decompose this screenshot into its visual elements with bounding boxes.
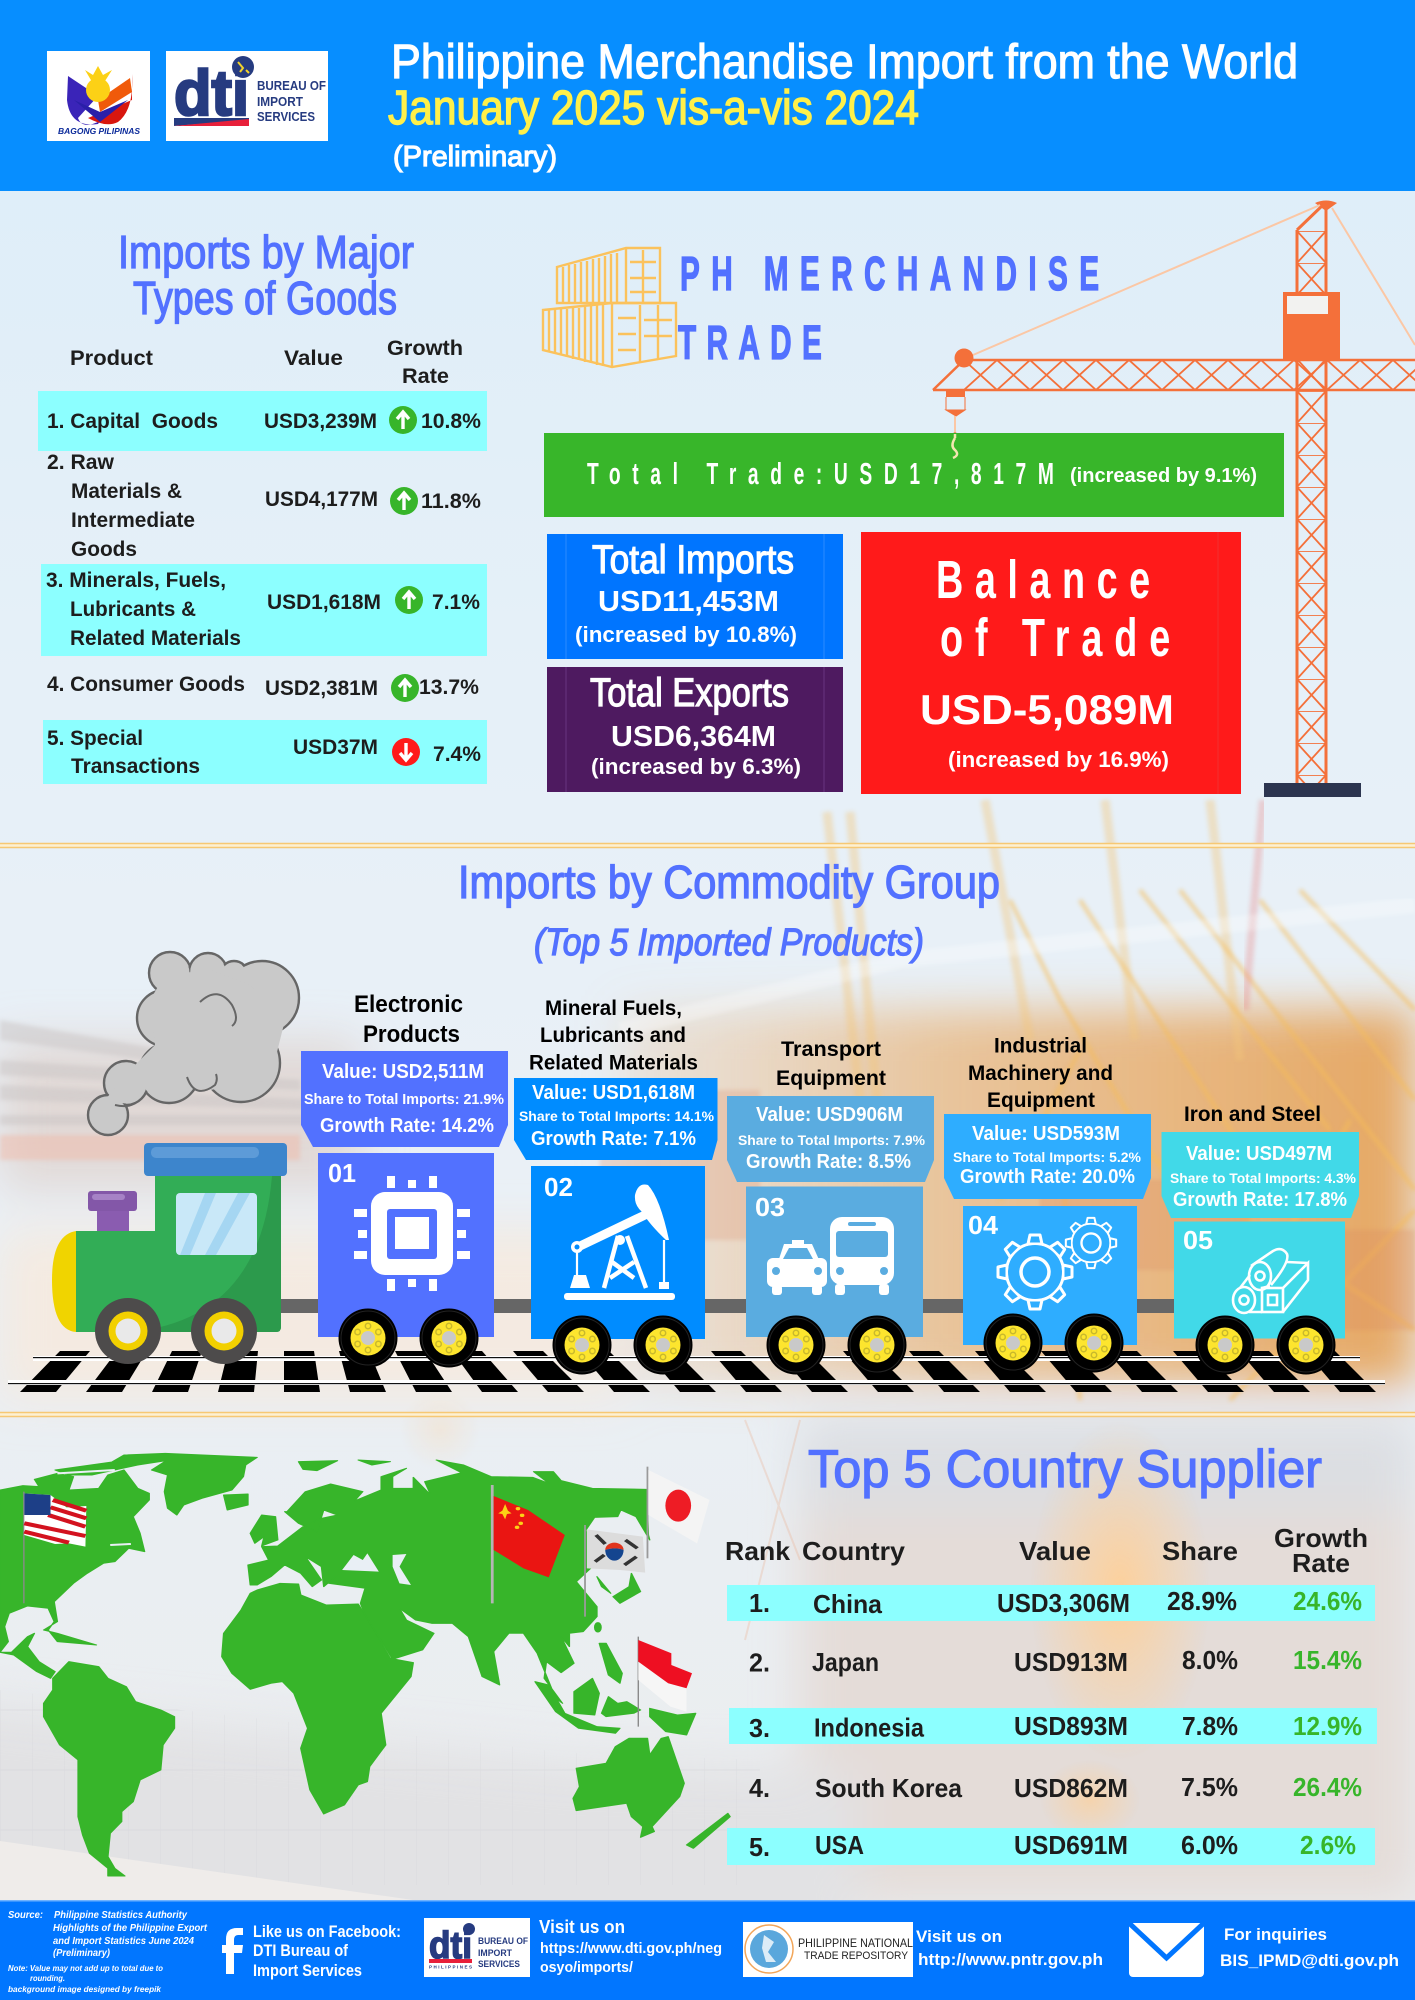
- stats box: Share to Total Imports: 21.9%: [304, 1091, 504, 1108]
- car label: Products: [363, 1021, 460, 1048]
- stats box: Value: USD593M: [972, 1123, 1120, 1145]
- illustration: tower crane: [933, 200, 1415, 797]
- stats box: Value: USD906M: [756, 1104, 903, 1126]
- train car 02: mineral fuels: [514, 997, 718, 1374]
- stats box: Growth Rate: 17.8%: [1173, 1189, 1347, 1211]
- table header: Value: [284, 347, 343, 370]
- PNTR website text: Visit us on: [916, 1927, 1002, 1946]
- world map with supplier flags: [0, 1453, 730, 1876]
- railway track: [8, 1351, 1385, 1392]
- panel: total trade: Total Trade:USD17,817M: [587, 458, 1054, 491]
- logo: DTI Bureau of Import Services: [166, 51, 328, 141]
- table: major types of goods: [38, 337, 487, 784]
- inquiries text: [1220, 1925, 1399, 1970]
- flag: China: [492, 1485, 565, 1603]
- row: minerals, fuels: 7.1%: [432, 591, 480, 614]
- source note: Note: Value may not add up to total due to: [8, 1963, 163, 1973]
- source note: (Preliminary): [53, 1947, 110, 1959]
- table header: Country: [802, 1536, 906, 1566]
- row: special transactions: USD37M: [293, 736, 378, 759]
- icon: steel rolls: [1233, 1249, 1308, 1313]
- facebook text: Like us on Facebook:: [253, 1923, 401, 1941]
- stats box: Growth Rate: 14.2%: [320, 1115, 494, 1137]
- row: China: China: [813, 1589, 883, 1619]
- source note: and Import Statistics June 2024: [53, 1935, 194, 1947]
- row: Japan: USD913M: [1014, 1647, 1128, 1677]
- table header: Growth: [387, 337, 463, 360]
- logo: DTI Bureau of Import Services: dti: [174, 57, 249, 129]
- row: Japan: Japan: [812, 1647, 879, 1677]
- logo: DTI small: PHILIPPINES: [429, 1964, 472, 1970]
- table header: Share: [1162, 1536, 1238, 1566]
- table header: Growth: [1274, 1523, 1368, 1553]
- car label: Machinery and: [968, 1062, 1113, 1085]
- car label: Iron and Steel: [1184, 1103, 1321, 1126]
- heading: imports by commodity group: [458, 856, 1000, 964]
- flag: Indonesia: [638, 1637, 692, 1727]
- row: Indonesia: 7.8%: [1182, 1711, 1238, 1741]
- row: South Korea: 26.4%: [1293, 1772, 1362, 1802]
- panel: total imports: USD11,453M: [598, 586, 779, 618]
- icon: shipping containers: [543, 248, 676, 367]
- row: minerals, fuels: 3. Minerals, Fuels,: [46, 569, 226, 592]
- logo: DTI small: [424, 1918, 530, 1977]
- row: special transactions: [43, 720, 487, 784]
- source note: [8, 1909, 207, 1994]
- heading: PH merchandise trade: [678, 248, 1099, 370]
- row: capital goods: 10.8%: [421, 410, 481, 433]
- icon: smoke cloud: [88, 952, 299, 1135]
- panel: total imports: Total Imports: [592, 538, 794, 582]
- icon: oil pump: [564, 1184, 675, 1300]
- panel: total trade: (increased by 9.1%): [1070, 465, 1257, 487]
- row: China: [727, 1585, 1375, 1621]
- train car 02: mineral fuels: 02: [544, 1172, 573, 1202]
- logo: DTI Bureau of Import Services: SERVICES: [257, 109, 315, 124]
- table header: [70, 337, 463, 388]
- flag: South Korea: [585, 1525, 645, 1617]
- row: South Korea: USD862M: [1014, 1773, 1128, 1803]
- car label: Lubricants and: [540, 1024, 686, 1047]
- logo: Philippine National Trade Repository: [743, 1922, 913, 1977]
- row: raw materials: Goods: [71, 538, 137, 561]
- row: USA: 5.: [749, 1832, 770, 1862]
- icon: gears: [998, 1218, 1116, 1309]
- row: South Korea: 7.5%: [1181, 1772, 1238, 1802]
- row: South Korea: 4.: [749, 1773, 770, 1803]
- row: minerals, fuels: Lubricants &: [70, 598, 196, 621]
- map continents: [0, 1453, 730, 1876]
- car label: [776, 1038, 886, 1090]
- DTI website text: osyo/imports/: [540, 1959, 634, 1976]
- row: consumer goods: [47, 673, 479, 702]
- row: raw materials: 2. Raw: [47, 451, 115, 474]
- panel: total imports: (increased by 10.8%): [575, 622, 797, 647]
- heading: PH merchandise trade: TRADE: [678, 317, 822, 370]
- panel: total exports: (increased by 6.3%): [591, 754, 801, 779]
- row: China: 1.: [749, 1588, 770, 1618]
- car label: Industrial: [994, 1034, 1087, 1058]
- logo: Bagong Pilipinas: BAGONG PILIPINAS: [58, 126, 140, 136]
- logo: DTI small: dti: [429, 1925, 472, 1967]
- row: South Korea: [749, 1772, 1362, 1803]
- car label: Equipment: [776, 1067, 886, 1090]
- train car 05: iron and steel: 05: [1183, 1225, 1213, 1255]
- heading: imports by major types of goods: [118, 226, 414, 324]
- title: [388, 36, 1298, 173]
- row: raw materials: Materials &: [71, 480, 182, 503]
- stats box: Growth Rate: 7.1%: [531, 1128, 696, 1150]
- panel: total exports: USD6,364M: [611, 721, 776, 753]
- row: China: 24.6%: [1293, 1586, 1362, 1616]
- stats box: Share to Total Imports: 7.9%: [738, 1132, 926, 1148]
- row: USA: [727, 1828, 1375, 1865]
- icon: taxi and bus: [767, 1217, 894, 1295]
- row: raw materials: USD4,177M: [265, 488, 378, 511]
- DTI website text: Visit us on: [539, 1917, 625, 1937]
- footer band: [0, 1900, 1415, 2000]
- table header: [725, 1523, 1368, 1578]
- row: Japan: 15.4%: [1293, 1645, 1362, 1675]
- row: raw materials: 11.8%: [421, 490, 481, 513]
- table header: Rank: [725, 1536, 791, 1566]
- facebook text: Import Services: [253, 1962, 362, 1980]
- panel: total exports: [547, 667, 843, 792]
- row: Indonesia: [729, 1708, 1377, 1744]
- row: consumer goods: USD2,381M: [265, 677, 378, 700]
- car label: Related Materials: [529, 1052, 698, 1074]
- row: raw materials: Intermediate: [71, 509, 195, 532]
- car label: [354, 991, 463, 1048]
- header band: [0, 0, 1415, 191]
- row: special transactions: 7.4%: [433, 743, 481, 766]
- row: USA: 6.0%: [1181, 1830, 1238, 1860]
- car label: [529, 997, 698, 1074]
- row: Japan: 8.0%: [1182, 1645, 1238, 1675]
- PNTR website text: http://www.pntr.gov.ph: [918, 1950, 1103, 1969]
- icon: microchip: [354, 1176, 470, 1291]
- car label: Equipment: [987, 1089, 1095, 1112]
- row: special transactions: 5. Special: [47, 727, 143, 750]
- row: Indonesia: 3.: [749, 1713, 770, 1743]
- icon: facebook: [222, 1928, 243, 1974]
- heading: imports by major types of goods: Types of Goods: [133, 272, 397, 324]
- train car 03: transport equipment: 03: [755, 1192, 785, 1222]
- row: capital goods: 1. Capital Goods: [47, 410, 218, 433]
- coupling bar: [281, 1299, 1345, 1313]
- row: minerals, fuels: USD1,618M: [267, 591, 381, 614]
- row: special transactions: Transactions: [71, 755, 200, 778]
- row: raw materials: [47, 451, 481, 561]
- train car 03: transport equipment: [727, 1038, 934, 1374]
- row: South Korea: South Korea: [815, 1773, 963, 1803]
- car label: Electronic: [354, 991, 463, 1018]
- logo: Bagong Pilipinas: [47, 51, 150, 141]
- row: Japan: [749, 1645, 1362, 1678]
- row: capital goods: USD3,239M: [264, 410, 377, 433]
- panel: total imports: [547, 534, 843, 659]
- DTI website text: https://www.dti.gov.ph/neg: [540, 1940, 722, 1957]
- panel: balance of trade: Balance: [936, 549, 1150, 610]
- stats box: Share to Total Imports: 14.1%: [519, 1108, 715, 1124]
- heading: top 5 country supplier: Top 5 Country Supplier: [808, 1440, 1322, 1499]
- row: China: USD3,306M: [997, 1588, 1130, 1618]
- logo: DTI Bureau of Import Services: IMPORT: [257, 94, 303, 109]
- row: minerals, fuels: Related Materials: [70, 627, 241, 650]
- heading: PH merchandise trade: PH MERCHANDISE: [680, 248, 1099, 301]
- stats box: Growth Rate: 8.5%: [746, 1151, 911, 1173]
- heading: imports by major types of goods: Imports by Major: [118, 226, 414, 278]
- car label: Transport: [781, 1038, 881, 1061]
- flag: USA: [24, 1492, 86, 1603]
- row: USA: 2.6%: [1300, 1830, 1356, 1860]
- train car 01: electronic products: [301, 991, 508, 1368]
- flag: Japan: [647, 1467, 709, 1558]
- source note: Source:: [8, 1909, 43, 1921]
- panel: balance of trade: [861, 532, 1241, 794]
- title: Philippine Merchandise Import from the World: [391, 36, 1298, 89]
- title: January 2025 vis-a-vis 2024: [388, 82, 919, 135]
- row: consumer goods: 13.7%: [419, 676, 479, 699]
- table header: Rate: [402, 365, 449, 388]
- facebook text: [253, 1923, 401, 1980]
- logo: Philippine National Trade Repository: TRADE REPOSITORY: [804, 1950, 909, 1962]
- train car 01: electronic products: 01: [328, 1158, 356, 1188]
- stats box: [944, 1114, 1151, 1199]
- table header: Value: [1019, 1536, 1091, 1566]
- source note: rounding.: [30, 1973, 65, 1983]
- stats box: Value: USD497M: [1186, 1143, 1332, 1165]
- logo: DTI small: IMPORT: [478, 1948, 512, 1958]
- train car 05: iron and steel: [1162, 1103, 1359, 1374]
- car label: [968, 1034, 1113, 1112]
- stats box: [301, 1051, 508, 1147]
- stats box: Value: USD1,618M: [532, 1082, 695, 1104]
- stats box: [727, 1096, 934, 1182]
- stats box: Growth Rate: 20.0%: [960, 1166, 1135, 1188]
- logo: DTI small: SERVICES: [478, 1959, 520, 1969]
- PNTR website text: [916, 1927, 1103, 1969]
- row: Indonesia: 12.9%: [1293, 1711, 1362, 1741]
- row: capital goods: [38, 391, 487, 451]
- stats box: Value: USD2,511M: [322, 1061, 484, 1083]
- row: consumer goods: 4. Consumer Goods: [47, 673, 245, 696]
- stats box: Share to Total Imports: 5.2%: [953, 1149, 1142, 1165]
- table: top 5 country supplier: [725, 1523, 1377, 1865]
- row: USA: USD691M: [1014, 1830, 1128, 1860]
- row: Japan: 2.: [749, 1648, 770, 1678]
- source note: Philippine Statistics Authority: [54, 1909, 188, 1921]
- icon: envelope: [1129, 1923, 1204, 1977]
- panel: total trade: [544, 433, 1284, 517]
- illustration: locomotive: [52, 1143, 287, 1364]
- table header: Rate: [1292, 1548, 1350, 1578]
- inquiries text: BIS_IPMD@dti.gov.ph: [1220, 1951, 1399, 1970]
- title: (Preliminary): [393, 141, 557, 173]
- logo: DTI Bureau of Import Services: BUREAU OF: [257, 78, 326, 93]
- table header: Product: [70, 347, 153, 370]
- stats box: Share to Total Imports: 4.3%: [1170, 1170, 1357, 1186]
- train car 04: industrial machinery: 04: [968, 1210, 999, 1240]
- panel: balance of trade: USD-5,089M: [920, 686, 1174, 733]
- logo: Philippine National Trade Repository: PHILIPPINE NATIONAL: [798, 1936, 913, 1950]
- inquiries text: For inquiries: [1224, 1925, 1327, 1944]
- train car 04: industrial machinery: [944, 1034, 1151, 1372]
- car label: Mineral Fuels,: [545, 997, 682, 1020]
- row: Indonesia: Indonesia: [814, 1712, 924, 1742]
- stats box: [1162, 1132, 1359, 1218]
- source note: Highlights of the Philippine Export: [53, 1922, 207, 1934]
- row: Indonesia: USD893M: [1014, 1711, 1128, 1741]
- DTI website text: [539, 1917, 722, 1976]
- panel: balance of trade: of Trade: [940, 607, 1170, 668]
- heading: imports by commodity group: Imports by Commodity Group: [458, 856, 1000, 908]
- stats box: [514, 1078, 718, 1160]
- logo: DTI small: BUREAU OF: [478, 1936, 528, 1946]
- row: USA: USA: [815, 1830, 864, 1860]
- row: China: 28.9%: [1167, 1586, 1237, 1616]
- panel: balance of trade: (increased by 16.9%): [948, 747, 1169, 772]
- panel: total exports: Total Exports: [590, 671, 789, 715]
- facebook text: DTI Bureau of: [253, 1942, 348, 1960]
- heading: imports by commodity group: (Top 5 Imported Products): [534, 922, 924, 964]
- source note: background image designed by freepik: [8, 1984, 162, 1994]
- row: minerals, fuels: [41, 564, 487, 656]
